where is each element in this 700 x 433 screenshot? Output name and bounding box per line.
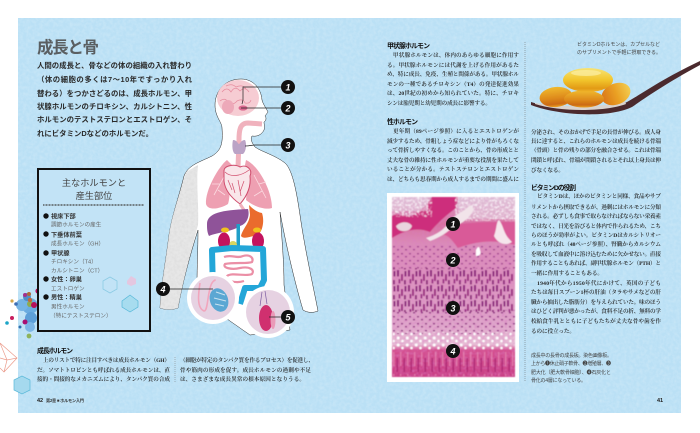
marker 3: 3 bbox=[285, 140, 291, 150]
section: thyroid hormone: 甲状腺ホルモン bbox=[387, 41, 430, 50]
marker 1: 1 bbox=[450, 220, 456, 230]
section: growth hormone: 上のリストで特に注目すべきは成長ホルモン（GH） bbox=[43, 356, 170, 364]
hormone list: （特にテストステロン） bbox=[50, 312, 112, 320]
section: role of vitamin D: るのに役立った。 bbox=[531, 327, 575, 335]
intro text block: れにビタミンDなどのホルモンだ。 bbox=[37, 129, 153, 138]
section: sex hormones: は、どちらも思春期から成人するまでの期間に盛んに bbox=[387, 175, 519, 183]
hormone list: 調節ホルモンの産生 bbox=[51, 220, 102, 228]
caption: growth plate bbox=[531, 352, 612, 384]
capsule left bbox=[539, 85, 573, 109]
thyroid bbox=[232, 140, 246, 154]
leader lines bbox=[163, 87, 288, 317]
hormone list: 女性：卵巣 bbox=[51, 276, 83, 284]
caption: growth plate: 上から❶休止硝子軟骨、❷増殖層、❸ bbox=[531, 360, 611, 367]
body silhouette bbox=[160, 79, 318, 335]
text: bones continued bbox=[531, 128, 661, 174]
trachea bbox=[238, 123, 262, 168]
section: role of vitamin D: ルとも呼ばれ（48ページ参照）、腎臓からカルシウム bbox=[531, 240, 661, 248]
text: bones continued: 長に達すると、これらのホルモンは成長を続ける骨端 bbox=[531, 137, 661, 145]
hormone list: 男性：精巣 bbox=[51, 294, 83, 302]
marker 2: 2 bbox=[284, 104, 291, 114]
text: bones continued: （骨頭）と骨の残りの部分を融合させる。これは骨端 bbox=[531, 146, 661, 154]
hormone list: チロキシン（T4） bbox=[51, 258, 97, 266]
capsule right bbox=[598, 79, 634, 109]
caption: growth plate: 肥大化（肥大軟骨細胞）、❹石灰化と bbox=[531, 369, 611, 376]
intro text block: 状腺ホルモンのチロキシン、カルシトニン、性 bbox=[37, 102, 193, 111]
marker 4: 4 bbox=[449, 346, 456, 356]
section: sex hormones: 性ホルモン bbox=[387, 117, 418, 126]
hormone list: 男性ホルモン bbox=[51, 302, 85, 310]
section: thyroid hormone bbox=[387, 41, 519, 107]
marker 4 bbox=[156, 282, 170, 296]
caption: growth plate: 成長中の長骨の成長板。染色画像板。 bbox=[531, 352, 612, 359]
section: role of vitamin D: 作用することもあれば、副甲状腺ホルモン（PTH）と bbox=[531, 259, 661, 267]
section: growth hormone: 成長ホルモン bbox=[37, 346, 73, 355]
hexagon decorations bbox=[103, 276, 138, 312]
section: thyroid hormone: め、特に成長、免疫、生殖と関係がある。甲状腺ホル bbox=[387, 70, 519, 78]
marker 4 bbox=[446, 344, 460, 358]
intro text block: ホルモンのテストステロンとエストロゲン、そ bbox=[37, 115, 192, 124]
section: role of vitamin D: 一緒に作用することもある。 bbox=[531, 269, 603, 277]
capsule top bbox=[563, 68, 613, 92]
inset: ovary bbox=[187, 272, 239, 324]
marker 4: 4 bbox=[159, 284, 166, 294]
inset: testis bbox=[242, 286, 294, 338]
section: role of vitamin D: ではなく、日光を浴びると体内で作られるため、こち bbox=[531, 222, 661, 230]
hormone list: 視床下部 bbox=[51, 212, 77, 220]
section: sex hormones: 更年期（89ページ参照）に入るとエストロゲンが bbox=[393, 127, 519, 135]
section: thyroid hormone: シンは胎児期と幼児期の成長に影響する。 bbox=[387, 99, 491, 107]
spoon with capsules bbox=[531, 61, 700, 114]
marker 3 bbox=[446, 301, 460, 315]
hormone list: 下垂体前葉 bbox=[51, 231, 83, 239]
caption: vitamin D capsules: のサプリメントで手軽に摂取できる。 bbox=[577, 49, 661, 56]
footer left bbox=[37, 397, 84, 404]
hormone list: カルシトニン（CT） bbox=[51, 268, 103, 274]
tissue layers bbox=[392, 197, 515, 377]
brain bbox=[217, 80, 259, 116]
large intestine bbox=[212, 248, 264, 304]
lungs bbox=[206, 160, 272, 209]
section: growth hormone: は、さまざまな成長異常の根本原因となりうる。 bbox=[180, 375, 305, 383]
panel heading: 産生部位 bbox=[76, 190, 112, 201]
section: role of vitamin D: ビタミンDの役割 bbox=[531, 183, 576, 192]
marker 1 bbox=[446, 217, 460, 231]
caption: vitamin D capsules: ビタミンDホルモンは、カプセルなど bbox=[577, 41, 660, 48]
section: role of vitamin D: リメントから摂取できるが、過剰にはホルモンに分類 bbox=[531, 203, 661, 211]
hormone list bbox=[43, 212, 112, 320]
intro text block: 人間の成長と、骨などの体の組織の入れ替わり bbox=[37, 61, 192, 70]
title: 成長と骨 bbox=[37, 37, 99, 57]
marker 5 bbox=[281, 310, 295, 324]
panel: main hormones bbox=[38, 169, 150, 331]
page number right: 41 bbox=[657, 398, 663, 404]
panel heading: 主なホルモンと bbox=[62, 177, 126, 188]
section: role of vitamin D: 校給食牛乳とともに子どもたちが丈夫な骨や歯を作 bbox=[531, 317, 661, 325]
capsule middle bbox=[564, 90, 604, 108]
section: growth hormone bbox=[37, 346, 314, 383]
intro text block: （体の細胞の多くは7～10年ですっかり入れ bbox=[37, 75, 193, 84]
section: role of vitamin D bbox=[531, 183, 661, 335]
marker 2 bbox=[446, 253, 460, 267]
micrograph of growth plate bbox=[387, 193, 519, 382]
marker 5: 5 bbox=[285, 312, 291, 322]
marker 3: 3 bbox=[450, 304, 456, 314]
section: role of vitamin D: される。必ずしも食事で取らなければならない栄養素 bbox=[531, 212, 661, 220]
section: thyroid hormone: 甲状腺ホルモンは、体内のあらゆる細胞に作用す bbox=[393, 51, 519, 59]
section: role of vitamin D: らのほうが効率がよい。ビタミンDはカルシトリオー bbox=[531, 231, 661, 239]
section: thyroid hormone: は、20世紀の初めから知られていた。特に、チロキ bbox=[387, 89, 519, 97]
section: role of vitamin D: 臓から抽出した脂肪分）を与えられていた。味のほう bbox=[531, 298, 661, 306]
marker 3 bbox=[281, 138, 295, 152]
marker 2 bbox=[281, 101, 295, 115]
grey textured arm bbox=[160, 165, 198, 310]
footer left: 第2章 ■ ホルモン入門 bbox=[46, 397, 84, 404]
caption: growth plate: 骨化の4層になっている。 bbox=[531, 377, 586, 384]
molecule decoration bbox=[0, 288, 46, 394]
liver bbox=[207, 209, 249, 236]
small intestine bbox=[224, 255, 253, 282]
intro text block bbox=[37, 61, 193, 138]
body figure bbox=[156, 79, 318, 338]
section: role of vitamin D: はひどく評判が悪かったが、食料不足の折、無料の学 bbox=[531, 307, 661, 315]
section: role of vitamin D: 1940年代から1950年代にかけて、英国の子ども bbox=[537, 279, 661, 287]
section: thyroid hormone: モンの一種であるチロキシン（T4）の発達促進効果 bbox=[387, 80, 519, 88]
hormone list: 甲状腺 bbox=[51, 250, 70, 258]
section: growth hormone: 骨や筋肉の形成を促す。成長ホルモンの過剰や不足 bbox=[180, 366, 311, 374]
section: sex hormones: いることが分かる。テストステロンとエストロゲン bbox=[387, 165, 519, 173]
footer left: 42 bbox=[37, 398, 43, 404]
stomach bbox=[241, 205, 263, 238]
kidneys and spine bbox=[218, 224, 264, 250]
text: bones continued: 閉鎖と呼ばれ、骨端が閉鎖されるとそれ以上身長は伸 bbox=[531, 156, 661, 164]
section: role of vitamin D: ビタミンDは、ほかのビタミンと同様、食品やサプ bbox=[537, 192, 661, 200]
heart bbox=[224, 165, 251, 210]
section: sex hormones: 減少するため、骨粗しょう症などにより骨がもろくな bbox=[387, 137, 519, 145]
marker 1: 1 bbox=[285, 82, 291, 92]
section: growth hormone: （細胞が特定のタンパク質を作るプロセス）を促進し、 bbox=[180, 356, 314, 364]
spoon bbox=[531, 61, 700, 114]
hormone list: エストロゲン bbox=[51, 284, 85, 292]
hormone list: 成長ホルモン（GH） bbox=[51, 240, 104, 248]
panel heading bbox=[62, 177, 126, 201]
section: sex hormones: って骨折しやすくなる。このことから、骨の形成とと bbox=[387, 146, 519, 154]
section: sex hormones: 丈夫な骨の維持に性ホルモンが重要な役割を果たして bbox=[387, 156, 519, 164]
text: bones continued: びなくなる。 bbox=[531, 166, 564, 174]
section: sex hormones bbox=[387, 117, 519, 183]
section: growth hormone: 接的・間接的なメカニズムにより、タンパク質の合成 bbox=[37, 375, 170, 383]
intro text block: 替わる）をつかさどるのは、成長ホルモン、甲 bbox=[37, 89, 192, 98]
text: bones continued: 分泌され、そのおかげで手足の長骨が伸びる。成人身 bbox=[531, 128, 661, 136]
section: role of vitamin D: たちは毎日スプーン1杯の肝油（タラやサメなどの肝 bbox=[531, 288, 661, 296]
section: role of vitamin D: を吸収して血液中に溶け込むために欠かせない。直接 bbox=[531, 250, 661, 258]
caption: vitamin D capsules bbox=[577, 41, 661, 56]
marker 1 bbox=[281, 80, 295, 94]
section: growth hormone: だ。ソマトトロピンとも呼ばれる成長ホルモンは、直 bbox=[37, 366, 170, 374]
section: thyroid hormone: る。甲状腺ホルモンには代謝を上げる作用があるた bbox=[387, 61, 519, 69]
marker 2: 2 bbox=[449, 256, 456, 266]
